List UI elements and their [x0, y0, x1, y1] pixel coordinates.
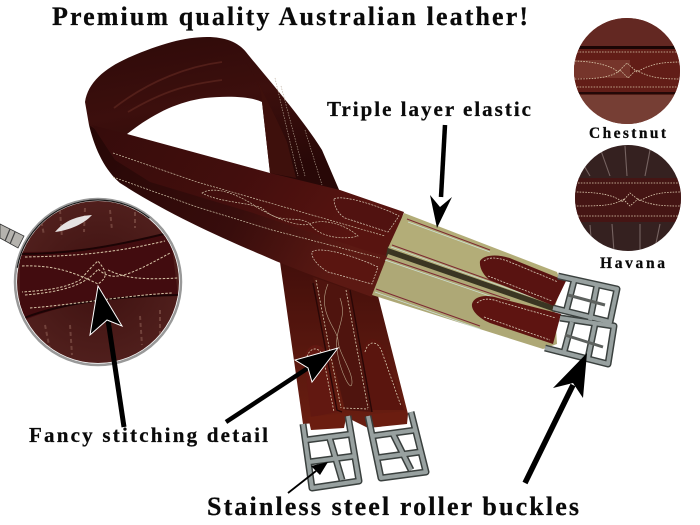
- lower roller buckles: [303, 412, 426, 488]
- right roller buckles: [545, 276, 617, 364]
- chestnut swatch: [574, 18, 680, 124]
- arrow: fancy stitching on strap: [226, 348, 338, 422]
- girth: leather straps, elastic and buckles: [85, 37, 617, 488]
- lower band of the leather strap: [89, 125, 390, 297]
- triple layer elastic label: Triple layer elastic: [327, 97, 531, 121]
- triple layer elastic: [372, 213, 562, 349]
- arrow: fancy stitching on magnifier: [90, 286, 124, 427]
- havana swatch: [575, 145, 681, 251]
- fancy stitching label: Fancy stitching detail: [29, 423, 268, 447]
- upper band of the leather strap: [92, 125, 404, 256]
- stainless steel roller buckles label: Stainless steel roller buckles: [207, 492, 579, 521]
- title: Premium quality Australian leather!: [52, 2, 528, 31]
- magnifying glass handle: [0, 224, 24, 248]
- chestnut label: Chestnut: [589, 125, 667, 142]
- havana label: Havana: [600, 255, 665, 272]
- arrow: right buckle: [525, 353, 587, 483]
- fancy stitching on the strap: [113, 153, 385, 258]
- arrow: lower buckle: [288, 462, 328, 493]
- magnifying glass detail circle: [14, 198, 182, 366]
- arrow: triple layer elastic: [430, 125, 452, 228]
- leather tabs over the elastic: [472, 255, 566, 344]
- strap running down to the lower buckles: [280, 262, 408, 430]
- leather end stitching panels: [312, 198, 399, 284]
- leather loop: [85, 37, 340, 192]
